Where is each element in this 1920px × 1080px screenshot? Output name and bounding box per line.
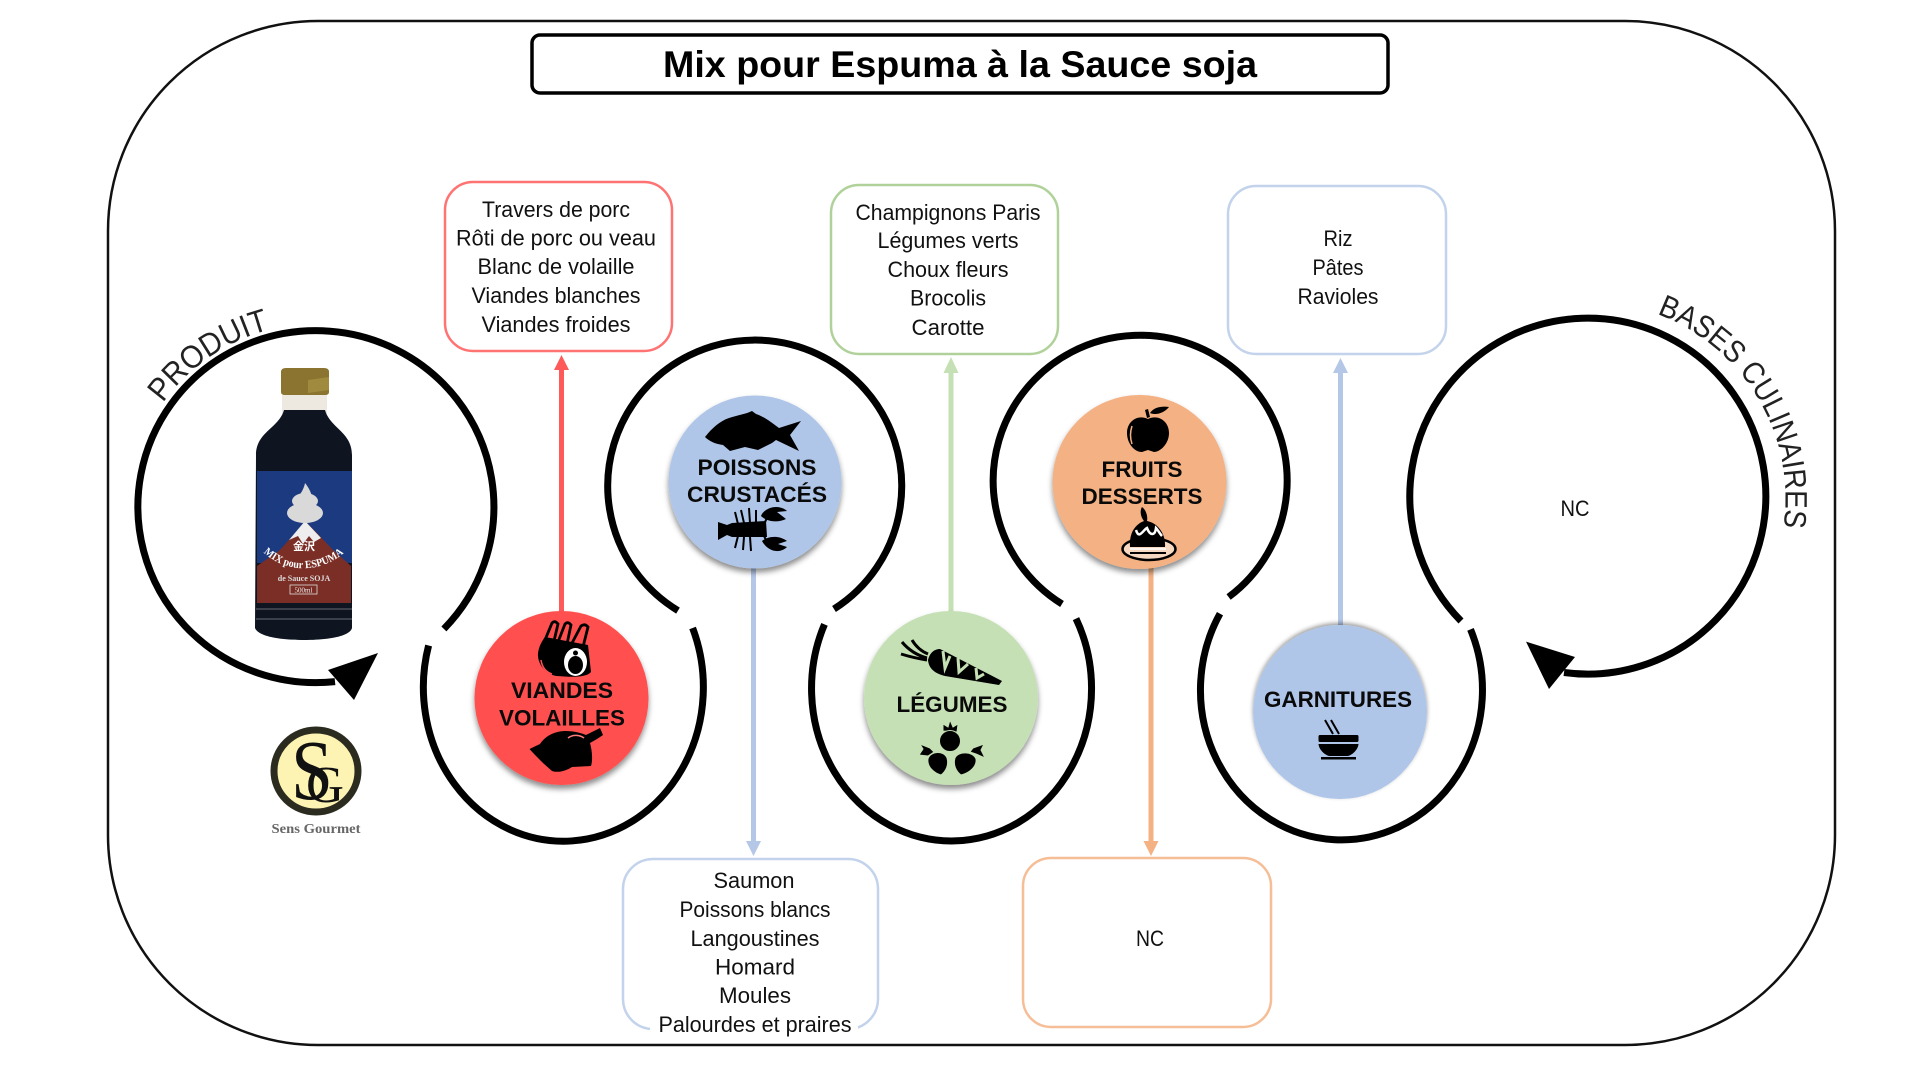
icon: carrot (901, 640, 1002, 685)
panel: garnitures list (1228, 186, 1446, 354)
title (532, 35, 1388, 93)
panel: légumes list: Légumes verts (878, 228, 1018, 253)
panel: poissons list: Langoustines (690, 926, 820, 951)
panel: légumes list: Champignons Paris (856, 200, 1040, 225)
panel: fruits list: NC (1136, 926, 1164, 951)
panel: légumes list: Choux fleurs (888, 257, 1008, 282)
product bottle (255, 368, 352, 640)
panel: poissons list: Palourdes et praires (658, 1012, 852, 1037)
panel: poissons list: Saumon (714, 868, 794, 893)
icon: bowl (1318, 720, 1358, 760)
panel: garnitures list: Riz (1324, 226, 1352, 251)
node: fruits desserts (1052, 395, 1226, 569)
node: viandes volailles: VOLAILLES (499, 706, 625, 730)
panel: poissons list: Moules (719, 983, 791, 1008)
icon: chicken (530, 728, 603, 772)
ring: garnitures (1200, 614, 1482, 840)
node: poissons crustacés: POISSONS (698, 455, 816, 480)
panel: poissons list (623, 859, 878, 1037)
node: fruits desserts: DESSERTS (1082, 484, 1202, 509)
text: bases culinaires NC: NC (1560, 496, 1590, 521)
icon: apple (1127, 407, 1169, 452)
arrow: garnitures up (1333, 358, 1348, 628)
panel: viandes list: Blanc de volaille (478, 254, 634, 279)
panel: viandes list: Viandes froides (482, 312, 630, 337)
panel: viandes list: Viandes blanches (472, 283, 640, 308)
panel: légumes list (831, 185, 1058, 354)
icon: lobster (718, 507, 787, 551)
ring: fruits desserts (993, 335, 1287, 604)
node: garnitures: GARNITURES (1264, 687, 1412, 712)
arrow: viandes up (554, 355, 569, 616)
logo: Sens Gourmet: S (291, 722, 333, 818)
node: viandes volailles (474, 611, 648, 785)
ring: viandes volailles (423, 628, 703, 841)
arrow: légumes up (944, 357, 958, 616)
product bottle: 500ml (295, 586, 312, 594)
label: produit: PRODUIT (147, 308, 263, 401)
product bottle: 金沢 (293, 539, 315, 553)
node: fruits desserts: FRUITS (1102, 457, 1182, 482)
icon: radishes (919, 720, 985, 775)
node: poissons crustacés: CRUSTACÉS (687, 482, 827, 507)
icon: fish (705, 411, 801, 451)
ring: produit (138, 331, 494, 700)
arrow: fruits down (1144, 565, 1158, 856)
panel: viandes list: Rôti de porc ou veau (456, 226, 656, 250)
ring: bases culinaires (1410, 318, 1766, 689)
node: légumes (864, 611, 1038, 785)
ring: légumes (812, 619, 1092, 841)
node: garnitures (1253, 625, 1427, 799)
logo: Sens Gourmet (272, 722, 361, 837)
node: viandes volailles: VIANDES (511, 678, 613, 703)
panel: légumes list: Carotte (912, 315, 984, 340)
panel: fruits list (1023, 858, 1271, 1027)
product bottle: MIX pour ESPUMA (264, 547, 344, 568)
logo: Sens Gourmet: Sens Gourmet (272, 822, 361, 837)
panel: légumes list: Brocolis (910, 286, 986, 310)
product bottle: de Sauce SOJA (278, 574, 330, 583)
panel: poissons list: Homard (715, 954, 795, 980)
panel: viandes list (445, 182, 672, 351)
panel: garnitures list: Pâtes (1312, 255, 1364, 280)
panel: viandes list: Travers de porc (482, 197, 630, 222)
icon: pudding (1122, 507, 1176, 560)
icon: rack of meat (538, 622, 591, 677)
panel: poissons list: Poissons blancs (680, 897, 830, 922)
label: bases culinaires: BASES CULINAIRES (1659, 295, 1807, 528)
logo: Sens Gourmet: G (306, 757, 344, 814)
ring: poissons crustacés (608, 340, 902, 611)
arrow: poissons down (746, 565, 761, 856)
node: poissons crustacés (668, 396, 842, 568)
title: Mix pour Espuma à la Sauce soja (663, 44, 1257, 85)
panel: garnitures list: Ravioles (1298, 284, 1378, 309)
node: légumes: LÉGUMES (896, 692, 1008, 717)
